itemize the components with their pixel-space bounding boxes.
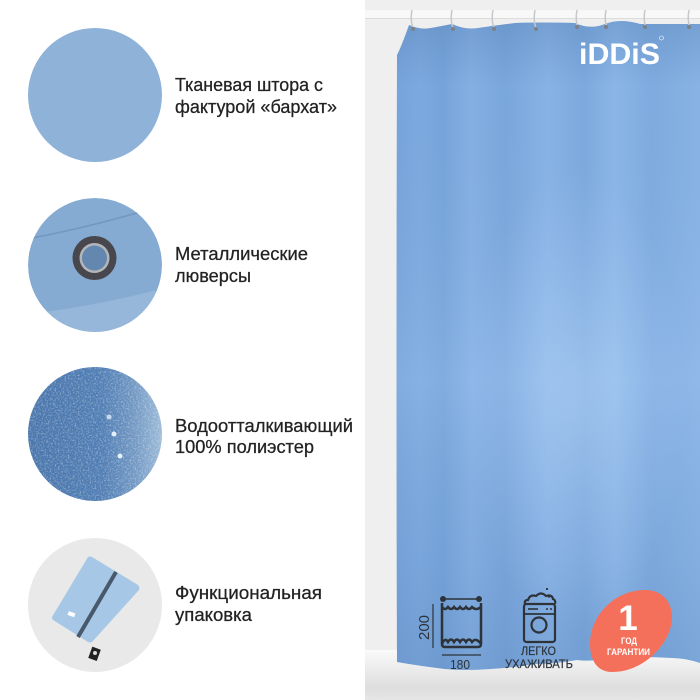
text: fabric curtain (175, 75, 337, 117)
curtain ring eyelets (411, 25, 691, 31)
circle: functional packaging (28, 538, 162, 672)
text: water repellent polyester: Водоотталкивающий (175, 416, 353, 436)
curtain fabric (395, 20, 700, 675)
text: metal grommets: Металлические (175, 244, 308, 264)
icon: size 180 x 200: 200 (416, 615, 433, 640)
text: fabric curtain: Тканевая штора с (175, 75, 323, 95)
badge: 1 year warranty: ГОД (621, 636, 638, 646)
icon: easy care washing machine: УХАЖИВАТЬ (505, 659, 573, 671)
circle: metal grommet (28, 198, 165, 340)
badge: 1 year warranty: ГАРАНТИИ (607, 647, 650, 657)
icon: easy care washing machine (505, 588, 573, 671)
text: functional packaging (175, 583, 322, 625)
badge: 1 year warranty (590, 590, 672, 672)
circle: velvet fabric texture (28, 28, 162, 162)
text: functional packaging: упаковка (175, 605, 253, 625)
curtain rings (411, 10, 690, 28)
panel: curtain photo (365, 0, 700, 700)
logo: IDDIS: iDDiS (579, 38, 660, 71)
circle: water repellent droplets (28, 367, 162, 501)
text: water repellent polyester (175, 416, 353, 457)
text: water repellent polyester: 100% полиэстер (175, 437, 314, 457)
text: functional packaging: Функциональная (175, 583, 322, 603)
text: metal grommets (175, 244, 308, 286)
text: metal grommets: люверсы (175, 266, 251, 286)
icon: size 180 x 200 (416, 596, 482, 672)
badge: 1 year warranty: 1 (618, 599, 638, 638)
text: fabric curtain: фактурой «бархат» (175, 97, 337, 117)
icon: size 180 x 200: 180 (450, 657, 470, 672)
icon: easy care washing machine: ЛЕГКО (521, 646, 556, 658)
